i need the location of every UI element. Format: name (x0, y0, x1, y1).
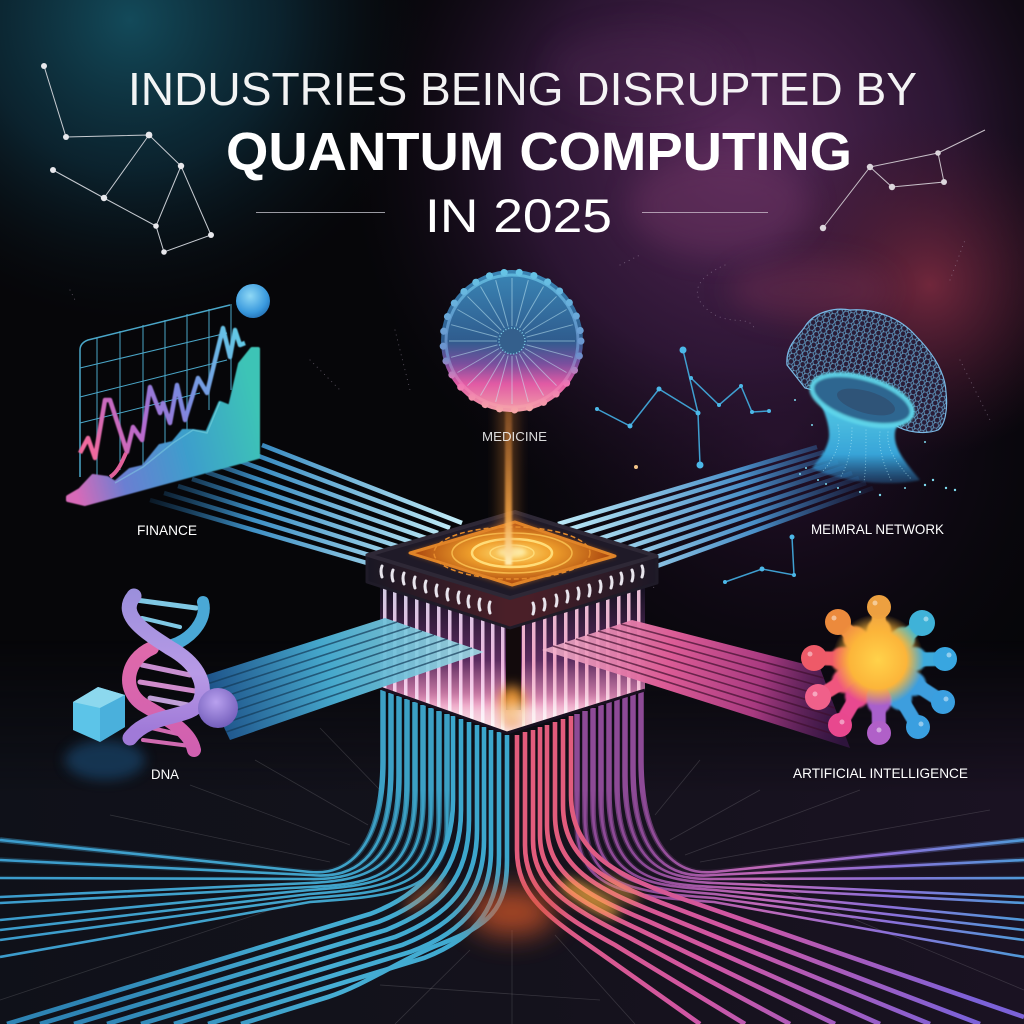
pink strand (129, 648, 194, 750)
chip top (368, 512, 656, 598)
constellation: top right (820, 130, 985, 231)
energy beam (498, 405, 518, 565)
ribbon: artificial intelligence to chip (542, 620, 850, 748)
processor pillars (380, 588, 646, 734)
flow lines: right magenta bundle (517, 690, 1024, 1024)
chart area (68, 349, 258, 504)
label: medicine: MEDICINE (482, 430, 547, 444)
glow beneath DNA (65, 740, 145, 780)
chart line (80, 328, 245, 458)
particles (794, 399, 956, 496)
chip sides (367, 555, 657, 628)
sphere (198, 688, 238, 728)
chart sphere (236, 284, 270, 318)
floor perspective lines (0, 728, 1024, 1024)
icon: medicine sphere (441, 270, 583, 412)
blue strand (172, 602, 204, 645)
helix rungs (136, 600, 196, 746)
title line 2: QUANTUM COMPUTING (226, 122, 852, 182)
molecule core (832, 614, 924, 706)
quantum chip (367, 512, 657, 628)
flow lines: left blue bundle (0, 690, 507, 1024)
purple strand (129, 596, 202, 738)
medicine spokes (449, 278, 575, 404)
molecule arms (814, 607, 945, 733)
glowing core (408, 520, 617, 587)
chip contact ticks (381, 566, 643, 614)
ribbon: neural network to chip (558, 447, 873, 566)
title (128, 63, 917, 242)
blue constellation: lower right (723, 534, 796, 584)
cube (73, 687, 125, 742)
ribbon: DNA to chip (200, 618, 484, 740)
title line 1: INDUSTRIES BEING DISRUPTED BY (128, 63, 917, 115)
blue constellation: center (595, 346, 771, 469)
brain stem fibres (822, 425, 912, 482)
chart grid (80, 304, 231, 480)
molecule wide arm bases (842, 630, 915, 702)
icon: neural network brain (787, 309, 956, 496)
brain ring (806, 365, 918, 435)
label: artificial intelligence: ARTIFICIAL INTELLIGENCE (793, 765, 968, 781)
label: finance: FINANCE (137, 522, 197, 538)
title line 3: IN 2025 (425, 189, 612, 242)
star dust (70, 240, 990, 590)
label: neural network: MEIMRAL NETWORK (811, 521, 945, 537)
icon: artificial intelligence molecule (801, 595, 957, 745)
constellation: top left (41, 63, 214, 255)
ribbon: finance to chip (150, 445, 462, 563)
icon: finance chart (68, 284, 270, 504)
brain stem (812, 387, 920, 483)
label: DNA: DNA (151, 766, 180, 782)
icon: DNA helix (65, 596, 238, 780)
floor glow and orange glints (399, 872, 643, 936)
molecule balls (801, 595, 957, 745)
molecule highlights (808, 600, 952, 732)
